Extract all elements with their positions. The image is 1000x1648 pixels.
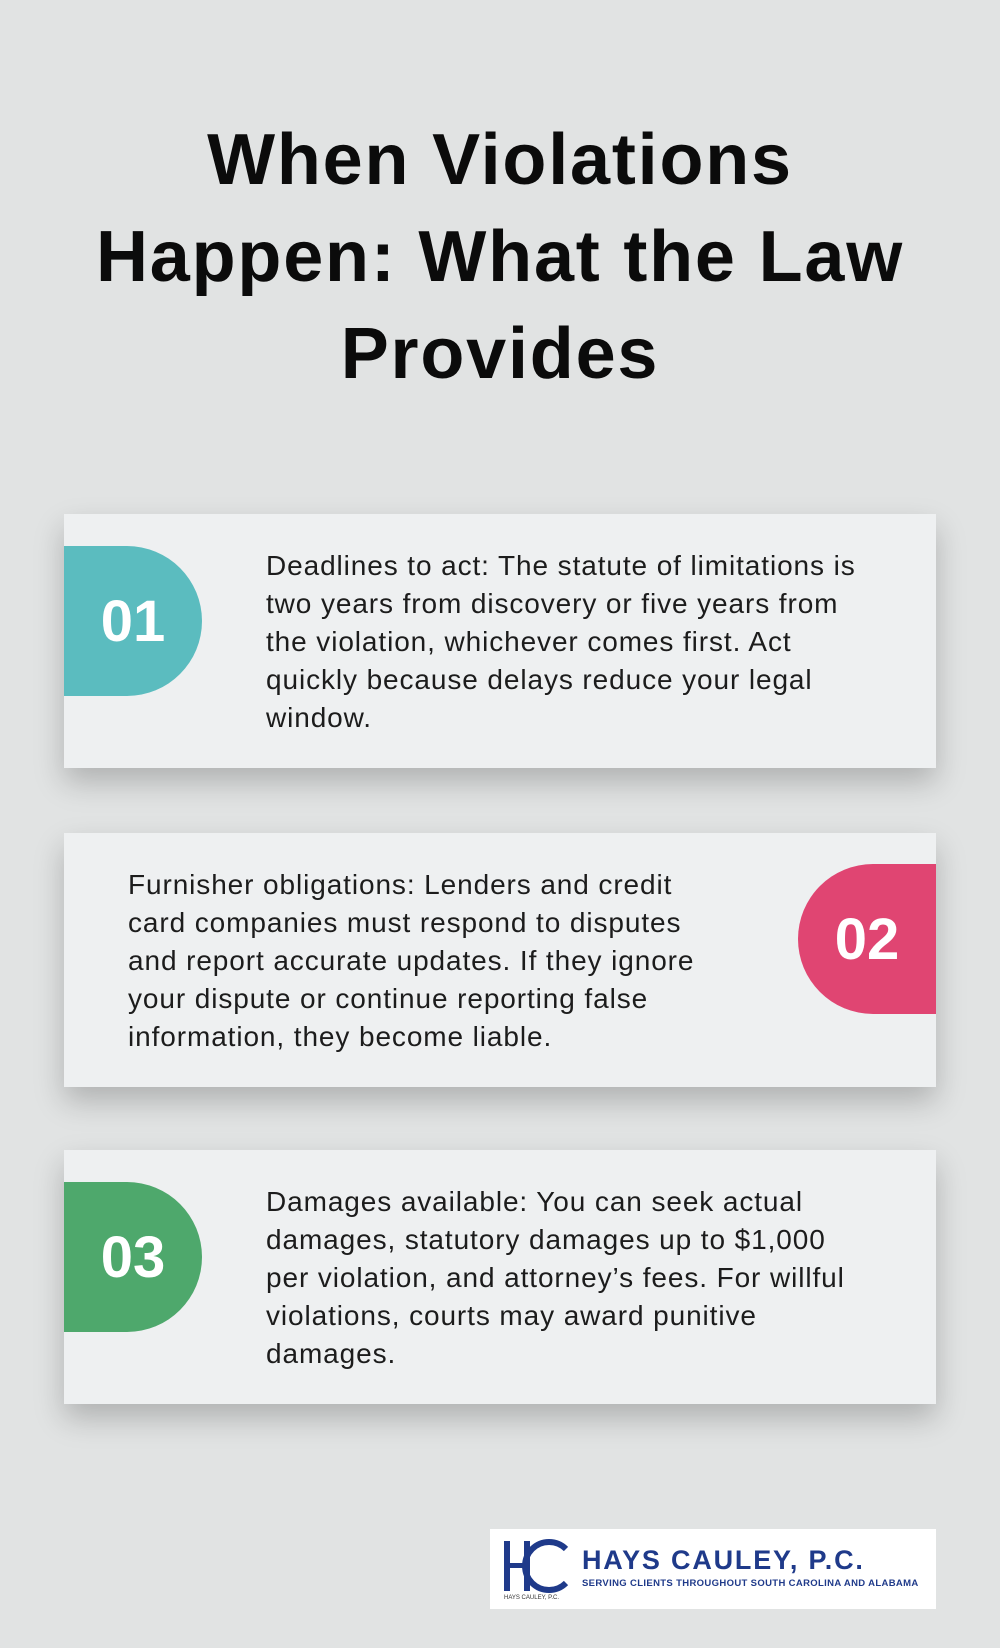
panel: card 02 furnisher xyxy=(64,833,936,1087)
badge 01 xyxy=(64,546,202,696)
text: furnisher xyxy=(128,869,694,1052)
logo mark: HAYS CAULEY, P.C. xyxy=(504,1595,559,1601)
text: furnisher: information, they become liable. xyxy=(128,1021,552,1052)
text: damages: Damages available: You can seek actual xyxy=(266,1186,803,1217)
logo: SERVING CLIENTS THROUGHOUT SOUTH CAROLINA AND ALABAMA xyxy=(582,1578,919,1589)
text: damages xyxy=(266,1186,845,1369)
panel: card 01 deadlines xyxy=(64,514,936,768)
text: damages: damages, statutory damages up to $1,000 xyxy=(266,1224,826,1255)
badge 02: 02 xyxy=(835,906,899,972)
logo text: HAYS CAULEY, P.C. xyxy=(582,1545,865,1575)
text: damages: damages. xyxy=(266,1338,396,1369)
text: furnisher: and report accurate updates. If they ignore xyxy=(128,945,694,976)
text: deadlines: two years from discovery or five years from xyxy=(266,588,838,619)
text: deadlines: window. xyxy=(266,702,372,733)
badge 01: 01 xyxy=(101,588,165,654)
badge 02 xyxy=(798,864,936,1014)
text: deadlines: Deadlines to act: The statute of limitations is xyxy=(266,550,856,581)
text: deadlines: the violation, whichever comes first. Act xyxy=(266,626,792,657)
text: deadlines xyxy=(266,550,856,733)
text: furnisher: Furnisher obligations: Lenders and credit xyxy=(128,869,672,900)
title: When Violations xyxy=(207,120,793,200)
panel: card 03 damages xyxy=(64,1150,936,1404)
title: Happen: What the Law xyxy=(96,217,904,297)
title: Provides xyxy=(341,314,659,394)
text: deadlines: quickly because delays reduce your legal xyxy=(266,664,813,695)
text: furnisher: card companies must respond to disputes xyxy=(128,907,681,938)
text: damages: violations, courts may award punitive xyxy=(266,1300,757,1331)
text: damages: per violation, and attorney’s fees. For willful xyxy=(266,1262,845,1293)
badge 03 xyxy=(64,1182,202,1332)
title xyxy=(96,120,904,394)
logo xyxy=(490,1529,936,1609)
badge 03: 03 xyxy=(101,1224,165,1290)
text: furnisher: your dispute or continue reporting false xyxy=(128,983,648,1014)
logo mark xyxy=(504,1539,568,1601)
